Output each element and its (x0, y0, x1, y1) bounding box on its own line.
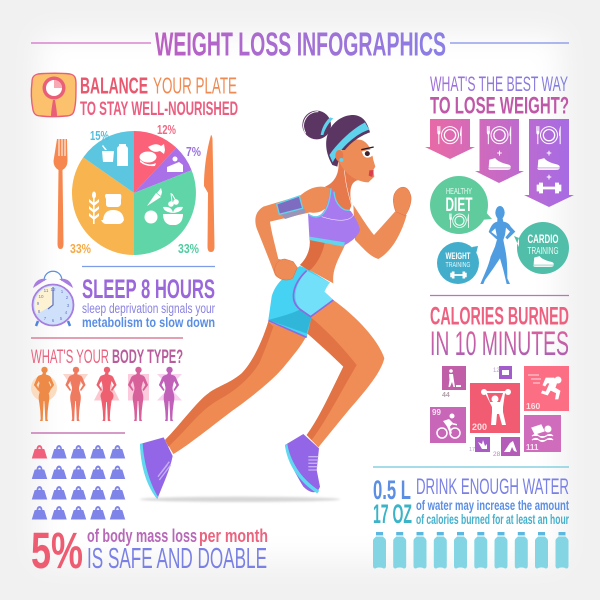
sports bra (308, 188, 360, 247)
icon: grains and bread (89, 192, 124, 224)
tile: 28: 28 (493, 451, 501, 458)
arrow: diet plus cardio plus weights: + (546, 172, 552, 182)
shoe: front (285, 434, 320, 493)
text: 5 percent safe: IS SAFE AND DOABLE (87, 543, 267, 575)
icon: alarm clock: 12 (50, 287, 56, 292)
icon: cake (167, 156, 183, 172)
arm: forward (353, 187, 411, 259)
text: 5 percent safe: 5% (31, 522, 83, 579)
panel: calories burned (430, 296, 569, 458)
pie labels (70, 122, 201, 256)
bubble: weight training: TRAINING (446, 260, 471, 269)
tile: cycling 99: 99 (432, 408, 441, 417)
panel: body type (31, 338, 183, 421)
heading: body type: WHAT'S YOUR (31, 347, 109, 368)
text: sleep 8 hours: SLEEP 8 HOURS (82, 274, 215, 304)
head (302, 111, 375, 182)
runner illustration (140, 111, 411, 502)
icon: knife (204, 135, 214, 252)
text: 5 percent safe (31, 522, 268, 579)
text: sleep 8 hours: metabolism to slow down (82, 315, 215, 330)
tile: cycling 99 (430, 407, 466, 443)
tile: swimming 111: 111 (526, 443, 539, 452)
icon: alarm clock: 11 (44, 288, 49, 293)
bubble: healthy diet: DIET (446, 195, 473, 216)
heading: balance your plate (80, 72, 238, 120)
neck (325, 160, 360, 217)
text: 5 percent safe: per month (199, 526, 268, 546)
pie labels: 33% (178, 241, 199, 256)
panel: drink water (373, 467, 569, 568)
icon: alarm clock: 6 (52, 318, 55, 323)
bubble: weight training: WEIGHT (446, 251, 471, 261)
tile: 12 (493, 366, 512, 379)
bubble: healthy diet: HEALTHY (446, 186, 472, 196)
arrow: diet plus cardio plus weights: + (546, 148, 552, 158)
tile: walking 44 (442, 366, 466, 399)
chart: weights (32, 445, 125, 520)
heading: balance your plate: TO STAY WELL-NOURISHED (80, 98, 238, 120)
tile: 12: 12 (493, 368, 500, 374)
shadow (140, 497, 340, 502)
lower body (140, 266, 384, 502)
panel: sleep (32, 266, 215, 330)
tile: running 160 (524, 366, 569, 411)
heading: calories burned (430, 302, 569, 363)
arrow: diet plus cardio plus weights (524, 119, 574, 207)
bubble: cardio training: CARDIO (528, 232, 558, 246)
icon: alarm clock: 10 (38, 294, 44, 299)
pie labels: 15% (90, 128, 109, 143)
panel: balance your plate (31, 72, 238, 256)
tile: weightlifting 200: 200 (472, 422, 487, 432)
tile: 28 (493, 437, 520, 458)
icon: fork (54, 139, 68, 249)
arrow: diet (425, 119, 475, 159)
shorts (268, 266, 333, 337)
pie labels: 33% (70, 241, 91, 256)
arrow: diet plus cardio: + (497, 148, 502, 158)
icon: alarm clock (32, 271, 74, 326)
front leg (303, 300, 384, 447)
icon: alarm clock: 5 (60, 316, 63, 321)
bubble: weight training (437, 242, 479, 284)
text: drink enough water (416, 474, 569, 527)
pie labels: 7% (186, 144, 201, 159)
icon: alarm clock: 8 (38, 309, 41, 314)
pie chart: plate (72, 131, 196, 255)
tile: walking 44: 44 (442, 392, 450, 399)
icon: alarm clock: 3 (67, 303, 70, 308)
icon: alarm clock: 7 (44, 316, 47, 321)
icon: bathroom scale (31, 73, 76, 117)
text: sleep 8 hours: sleep deprivation signals your (82, 301, 215, 316)
heading: balance your plate: YOUR PLATE (153, 72, 237, 98)
arm: back (255, 187, 331, 280)
bubble: healthy diet (430, 176, 492, 234)
upper body (255, 111, 411, 283)
chart: body shapes (31, 367, 182, 421)
pie labels: 12% (157, 122, 176, 137)
icon: alarm clock: 9 (37, 301, 40, 306)
text: water amounts (373, 475, 412, 529)
icon: alarm clock: 1 (61, 289, 64, 294)
text: water amounts: 17 OZ (373, 499, 412, 529)
heading: best way (430, 73, 569, 120)
text: 5 percent safe: of body mass loss (87, 526, 197, 546)
tile: 17: 17 (469, 447, 475, 453)
back leg (165, 322, 306, 454)
icon: alarm clock: 2 (66, 295, 69, 300)
armband (277, 196, 306, 219)
icon: woman silhouette (480, 206, 515, 284)
heading: body type: BODY TYPE? (112, 347, 183, 368)
earphone wire (322, 167, 353, 220)
heading: balance your plate: BALANCE (80, 72, 148, 98)
text: sleep 8 hours (82, 274, 215, 330)
icon: vegetables and fruit (144, 188, 183, 225)
icon: dairy (102, 144, 128, 166)
torso (300, 237, 345, 283)
shoe: back (140, 437, 173, 499)
panel: body mass loss (31, 433, 268, 579)
bubble: cardio training (514, 222, 569, 274)
icon: meat and fish (140, 144, 165, 166)
bubble: cardio training: TRAINING (528, 245, 558, 257)
icon: alarm clock: 4 (65, 310, 68, 315)
text: water amounts: 0.5 L (373, 475, 411, 505)
tile: running 160: 160 (526, 401, 540, 411)
panel: best way to lose weight (425, 73, 574, 284)
arrow: diet plus cardio (475, 119, 524, 183)
tile: 17 (469, 437, 490, 453)
tile: swimming 111 (524, 415, 561, 452)
tile: weightlifting 200 (470, 383, 520, 433)
chart: water bottles (373, 532, 568, 568)
